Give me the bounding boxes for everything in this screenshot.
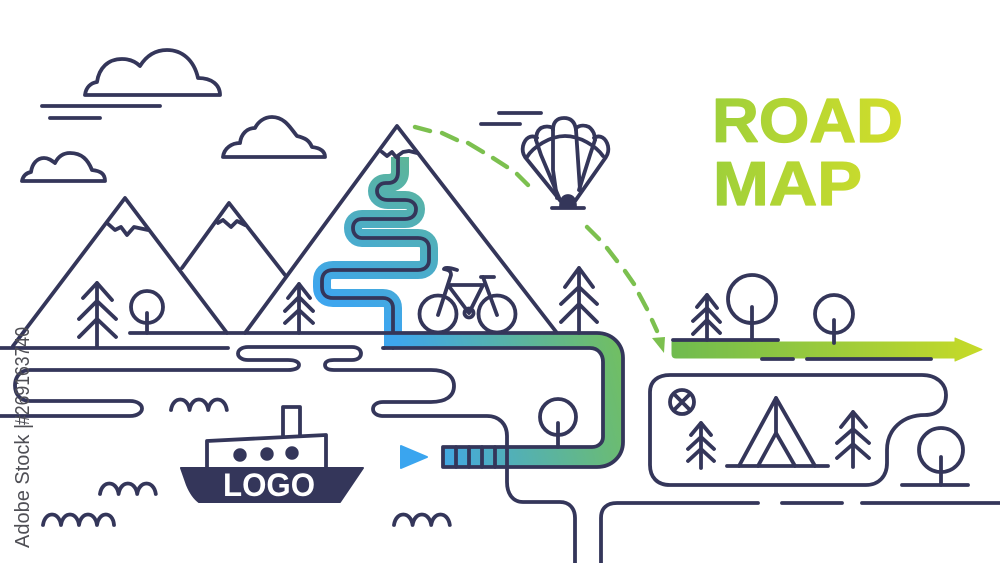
icon: bicycle	[420, 268, 516, 332]
title: road map	[712, 87, 903, 219]
mountain: middle	[182, 203, 285, 275]
winding road on mountain	[322, 157, 429, 348]
mountain: left	[13, 198, 227, 346]
pine: campsite left	[688, 423, 714, 468]
stock watermark id: #269163740	[12, 327, 34, 425]
wind lines: left	[42, 106, 160, 118]
cloud: small	[22, 153, 105, 181]
waves: lower right	[394, 514, 450, 525]
tree: small finish	[815, 295, 853, 343]
snow cap: large mountain	[382, 151, 417, 157]
title: road map: MAP	[713, 150, 862, 219]
finish arrow: green	[672, 338, 982, 361]
start marker: blue triangle	[401, 446, 427, 468]
mountain: large	[245, 126, 557, 333]
icon: tent	[727, 398, 828, 466]
pine: foot of large mountain	[285, 284, 313, 333]
pine: finish line	[693, 295, 720, 340]
title: road map: ROAD	[712, 87, 903, 156]
water and shore lines	[0, 347, 1000, 563]
tree: large finish	[728, 275, 776, 340]
waves: upper	[171, 400, 227, 410]
icon: parachute balloon	[523, 118, 608, 208]
pine: right of large mountain	[561, 268, 597, 333]
wind lines: balloon	[481, 113, 541, 124]
stock watermark id: Adobe Stock |	[12, 424, 34, 548]
tree: campsite right	[902, 428, 968, 485]
waves: middle	[100, 484, 156, 494]
cloud: medium	[223, 117, 325, 157]
ship with logo	[181, 407, 363, 503]
ship with logo: LOGO	[223, 467, 315, 503]
pine: left mountain	[79, 283, 116, 347]
road band: gradient with start ticks	[130, 333, 623, 467]
tree: inside road bend	[540, 399, 576, 447]
icon: crossed circle marker	[670, 390, 694, 414]
waves: lower left	[43, 514, 114, 525]
cloud: large	[85, 50, 220, 95]
tree: left mountain	[131, 291, 163, 333]
pine: campsite right	[837, 412, 869, 467]
stock watermark id	[12, 327, 34, 548]
campsite path outline	[650, 375, 946, 485]
dashed route arrow	[415, 127, 665, 353]
